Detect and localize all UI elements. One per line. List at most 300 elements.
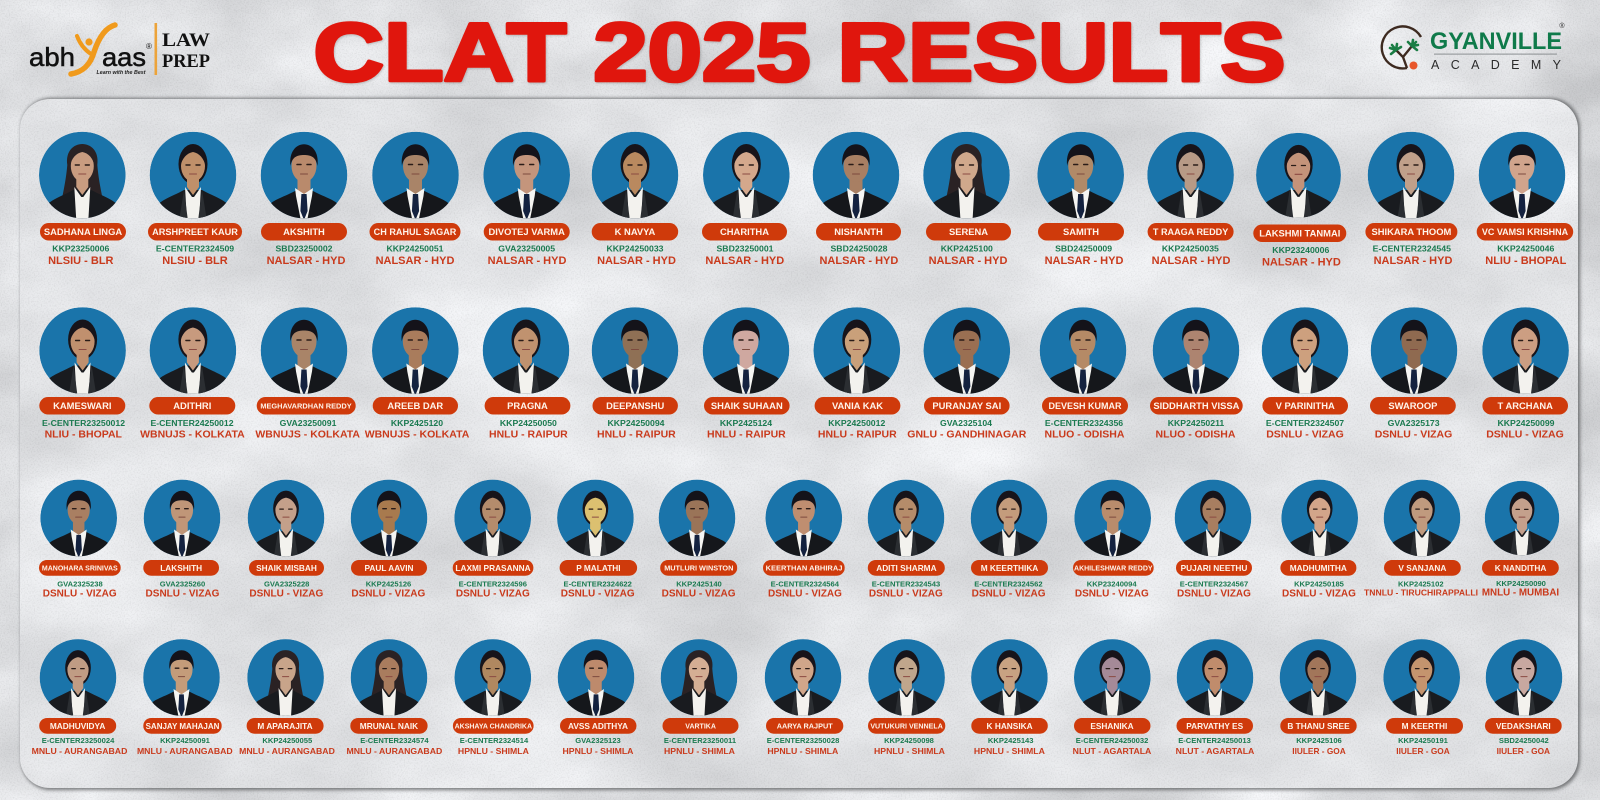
university: DSNLU - VIZAG [1266, 428, 1344, 440]
portrait [1153, 307, 1239, 396]
portrait [483, 307, 569, 396]
portrait [558, 639, 634, 718]
portrait [659, 480, 735, 559]
portrait [814, 307, 900, 396]
roll code: KKP24250191 [1398, 736, 1449, 745]
name pill: ADITHRI [173, 400, 211, 411]
name pill: T RAAGA REDDY [1153, 227, 1228, 237]
roll code: KKP24250012 [828, 418, 885, 428]
student: CHARITHA [702, 132, 790, 267]
university: DSNLU - VIZAG [768, 588, 842, 599]
student: M KEERTHIKA [971, 480, 1048, 599]
roll code: E-CENTER2324622 [564, 579, 632, 588]
logo: gyanville academy [1382, 22, 1565, 72]
university: NLSIU - BLR [162, 255, 228, 267]
portrait [248, 480, 324, 559]
university: NALSAR - HYD [488, 255, 566, 267]
portrait [1281, 480, 1358, 559]
portrait [247, 639, 324, 718]
roll code: E-CENTER2324356 [1045, 418, 1123, 428]
name pill: SHIKARA THOOM [1371, 226, 1452, 237]
university: MNLU - AURANGABAD [347, 746, 442, 756]
name pill: MADHUMITHA [1290, 563, 1347, 573]
university: MNLU - MUMBAI [1482, 587, 1559, 598]
roll code: KKP23250006 [52, 244, 109, 254]
student: AKSHITH [261, 132, 347, 267]
portrait [661, 639, 737, 718]
university: DSNLU - VIZAG [972, 588, 1046, 599]
student: K NAVYA [592, 132, 678, 267]
name pill: PUJARI NEETHU [1181, 563, 1247, 573]
university: NALSAR - HYD [267, 255, 345, 267]
university: NALSAR - HYD [1045, 255, 1123, 267]
student: ADITI SHARMA [868, 480, 945, 599]
portrait [150, 307, 236, 396]
university: IIULER - GOA [1497, 746, 1550, 756]
roll code: KKP24250033 [606, 244, 664, 254]
university: WBNUJS - KOLKATA [255, 428, 360, 440]
university: DSNLU - VIZAG [43, 588, 117, 599]
name pill: LAKSHITH [160, 563, 202, 573]
student: MADHUMITHA [1280, 480, 1358, 599]
university: NALSAR - HYD [705, 255, 784, 267]
university: DSNLU - VIZAG [561, 588, 635, 599]
roll code: KKP24250035 [1162, 244, 1219, 254]
university: NLSIU - BLR [48, 255, 114, 267]
name pill: K HANSIKA [987, 721, 1033, 731]
university: DSNLU - VIZAG [351, 588, 425, 599]
name pill: AREEB DAR [387, 400, 443, 411]
portrait [1383, 639, 1460, 718]
name pill: VARTIKA [685, 724, 716, 730]
portrait [1368, 132, 1454, 221]
university: NLUO - ODISHA [1156, 428, 1236, 440]
portrait [592, 132, 678, 221]
name pill: MEGHAVARDHAN REDDY [260, 401, 352, 410]
logo: abhyaas law prep: PREP [162, 51, 210, 72]
student: AKSHAYA CHANDRIKA [453, 639, 534, 756]
university: HNLU - RAIPUR [489, 428, 568, 440]
name pill: K NANDITHA [1495, 563, 1546, 573]
portrait [1280, 639, 1356, 718]
name pill: SHAIK SUHAAN [711, 400, 783, 411]
portrait [592, 307, 678, 396]
name pill: ESHANIKA [1090, 721, 1134, 731]
student: SHAIK SUHAAN [703, 307, 790, 440]
student: NISHANTH [813, 132, 901, 267]
portrait [40, 639, 116, 718]
university: HPNLU - SHIMLA [664, 746, 736, 756]
row 2 students [39, 307, 1569, 440]
portrait [1262, 307, 1348, 396]
portrait [1482, 307, 1569, 396]
name pill: PRAGNA [507, 400, 548, 411]
roll code: E-CENTER2324543 [872, 579, 940, 588]
student: ARSHPREET KAUR [148, 132, 242, 267]
student: PURANJAY SAI [907, 307, 1027, 440]
name pill: DIVOTEJ VARMA [488, 226, 565, 237]
student: PRAGNA [483, 307, 570, 440]
name pill: VC VAMSI KRISHNA [1482, 227, 1569, 237]
roll code: GVA2325238 [57, 579, 103, 588]
university: GNLU - GANDHINAGAR [907, 428, 1027, 440]
name pill: KEERTHAN ABHIRAJ [766, 564, 842, 573]
roll code: E-CENTER2324562 [974, 579, 1043, 588]
university: WBNUJS - KOLKATA [140, 428, 245, 440]
roll code: KKP2425140 [676, 579, 722, 588]
roll code: KKP24250046 [1497, 244, 1554, 254]
roll code: E-CENTER24250012 [150, 418, 234, 428]
logo: abhyaas law prep: LAW [162, 30, 210, 51]
roll code: GVA2325104 [940, 418, 992, 428]
university: NALSAR - HYD [1374, 255, 1452, 267]
student: SANJAY MAHAJAN [137, 639, 233, 756]
university: NALSAR - HYD [819, 255, 898, 267]
portrait [868, 480, 944, 559]
student: PAUL AAVIN [351, 480, 427, 599]
portrait [557, 480, 634, 559]
student: AARYA RAJPUT [765, 639, 843, 756]
student: PARVATHY ES [1176, 639, 1255, 756]
portrait [261, 132, 347, 221]
name pill: K NAVYA [615, 226, 656, 237]
university: HPNLU - SHIMLA [767, 746, 839, 756]
university: NALSAR - HYD [1262, 256, 1341, 268]
university: NALSAR - HYD [376, 255, 454, 267]
roll code: KKP24250051 [386, 244, 444, 254]
student: VARTIKA [661, 639, 738, 756]
logo: abhyaas law prep: abh [29, 42, 75, 72]
portrait [1384, 480, 1460, 559]
name pill: VEDAKSHARI [1496, 721, 1551, 731]
roll code: KKP24250099 [1498, 418, 1555, 428]
portrait [150, 132, 236, 221]
roll code: E-CENTER23250024 [42, 736, 115, 745]
roll code: KKP2425120 [391, 418, 443, 428]
student: MADHUVIDYA [32, 639, 127, 756]
roll code: GVA2325123 [575, 736, 621, 745]
university: IIULER - GOA [1396, 746, 1450, 756]
name pill: VANIA KAK [832, 400, 883, 411]
portrait [39, 132, 126, 221]
university: WBNUJS - KOLKATA [365, 428, 470, 440]
portrait [971, 639, 1048, 718]
portrait [765, 639, 841, 718]
student: M KEERTHI [1383, 639, 1463, 756]
roll code: E-CENTER24250013 [1178, 736, 1251, 745]
portrait [924, 307, 1010, 396]
name pill: SHAIK MISBAH [256, 563, 317, 573]
student: P MALATHI [557, 480, 637, 599]
university: NLIU - BHOPAL [1485, 255, 1567, 267]
name pill: SANJAY MAHAJAN [146, 722, 220, 731]
row 3 students [39, 480, 1559, 599]
portrait [765, 480, 842, 559]
portrait [1175, 480, 1251, 559]
portrait [813, 132, 899, 221]
logo: gyanville academy: ® [1559, 22, 1565, 30]
university: DSNLU - VIZAG [1177, 588, 1251, 599]
student: SAMITH [1037, 132, 1124, 267]
name pill: P MALATHI [576, 563, 621, 573]
portrait [1040, 307, 1126, 396]
name pill: ADITI SHARMA [876, 563, 937, 573]
portrait [1479, 132, 1565, 221]
portrait [351, 639, 427, 718]
portrait [1177, 639, 1253, 718]
student: CH RAHUL SAGAR [370, 132, 460, 267]
name pill: AARYA RAJPUT [777, 722, 833, 730]
name pill: SIDDHARTH VISSA [1153, 400, 1240, 411]
portrait [372, 132, 459, 221]
portrait [703, 132, 790, 221]
student: B THANU SREE [1280, 639, 1357, 756]
name pill: PAUL AAVIN [364, 563, 414, 573]
student: K NANDITHA [1482, 481, 1559, 598]
student: VC VAMSI KRISHNA [1477, 132, 1573, 267]
roll code: KKP24250055 [262, 736, 313, 745]
name pill: CH RAHUL SAGAR [374, 227, 457, 237]
student: KEERTHAN ABHIRAJ [763, 480, 845, 599]
student: SHAIK MISBAH [248, 480, 324, 599]
university: DSNLU - VIZAG [1486, 428, 1564, 440]
university: HPNLU - SHIMLA [874, 746, 946, 756]
roll code: KKP2425106 [1296, 736, 1342, 745]
roll code: E-CENTER23250028 [767, 736, 839, 745]
student: MUTLURI WINSTON [659, 480, 737, 599]
roll code: KKP24250185 [1294, 579, 1345, 588]
roll code: GVA23250091 [280, 418, 337, 428]
name pill: M KEERTHIKA [981, 563, 1038, 573]
portrait [39, 307, 126, 396]
title: CLAT 2025 RESULTS [314, 6, 1286, 98]
university: HNLU - RAIPUR [818, 428, 897, 440]
portrait [144, 480, 220, 559]
name pill: AKSHAYA CHANDRIKA [455, 723, 532, 730]
university: MNLU - AURANGABAD [239, 746, 335, 756]
name pill: MRUNAL NAIK [360, 721, 418, 731]
student: MANOHARA SRINIVAS [39, 480, 121, 599]
student: T ARCHANA [1482, 307, 1569, 440]
student: LAXMI PRASANNA [453, 480, 533, 599]
roll code: KKP24250050 [500, 418, 557, 428]
name pill: SAMITH [1063, 226, 1099, 237]
portrait [971, 480, 1047, 559]
roll code: E-CENTER2324574 [360, 736, 429, 745]
student: AVSS ADITHYA [558, 639, 636, 756]
name pill: AVSS ADITHYA [568, 721, 628, 731]
student: SHIKARA THOOM [1365, 132, 1457, 267]
roll code: E-CENTER2324509 [156, 244, 234, 254]
university: MNLU - AURANGABAD [137, 746, 233, 756]
name pill: AKHILESHWAR REDDY [1074, 566, 1153, 573]
name pill: V SANJANA [1398, 563, 1446, 573]
student: VEDAKSHARI [1485, 639, 1562, 756]
logo: abhyaas law prep: aas [102, 42, 146, 72]
student: DEVESH KUMAR [1040, 307, 1128, 440]
name pill: LAKSHMI TANMAI [1259, 228, 1340, 239]
portrait [40, 480, 117, 559]
roll code: E-CENTER2324514 [460, 736, 529, 745]
roll code: KKP24250098 [884, 736, 934, 745]
portrait [868, 639, 945, 718]
roll code: SBD23250002 [276, 244, 333, 254]
university: DSNLU - VIZAG [869, 588, 943, 599]
university: IIULER - GOA [1292, 746, 1346, 756]
portrait [1485, 481, 1559, 558]
name pill: AKSHITH [283, 226, 325, 237]
roll code: GVA2325173 [1388, 418, 1440, 428]
roll code: KKP24250094 [608, 418, 665, 428]
logo: abhyaas law prep: ® [146, 42, 152, 51]
university: DSNLU - VIZAG [662, 588, 736, 599]
student: V SANJANA [1364, 480, 1478, 598]
row 4 students [32, 639, 1562, 756]
name pill: MUTLURI WINSTON [664, 564, 733, 573]
roll code: KKP2425126 [366, 579, 411, 588]
student: LAKSHMI TANMAI [1253, 133, 1346, 268]
university: HPNLU - SHIMLA [563, 746, 634, 756]
university: DSNLU - VIZAG [249, 588, 323, 599]
university: MNLU - AURANGABAD [32, 746, 127, 756]
student: DIVOTEJ VARMA [483, 132, 570, 267]
university: NALSAR - HYD [929, 255, 1007, 267]
student: MRUNAL NAIK [347, 639, 442, 756]
name pill: SERENA [949, 226, 988, 237]
student: AREEB DAR [365, 307, 470, 440]
portrait [1074, 480, 1151, 559]
university: NLUT - AGARTALA [1073, 746, 1152, 756]
name pill: CHARITHA [720, 226, 769, 237]
student: DEEPANSHU [592, 307, 678, 440]
roll code: KKP2425143 [988, 736, 1034, 745]
roll code: E-CENTER23250012 [42, 418, 125, 428]
student: AKHILESHWAR REDDY [1073, 480, 1154, 599]
portrait [703, 307, 789, 396]
roll code: SBD24250028 [830, 244, 888, 254]
student: KAMESWARI [39, 307, 126, 440]
name pill: KAMESWARI [53, 400, 111, 411]
roll code: E-CENTER2324507 [1266, 418, 1344, 428]
row 1 students [39, 132, 1573, 268]
student: ADITHRI [140, 307, 245, 440]
portrait [1074, 639, 1151, 718]
student: SWAROOP [1370, 307, 1457, 440]
name pill: PURANJAY SAI [932, 400, 1001, 411]
student: SADHANA LINGA [39, 132, 126, 267]
portrait [1371, 307, 1457, 396]
roll code: GVA23250005 [498, 244, 555, 254]
roll code: GVA2325260 [160, 579, 205, 588]
roll code: KKP2425124 [720, 418, 772, 428]
student: SERENA [923, 132, 1011, 267]
name pill: M KEERTHI [1402, 721, 1447, 731]
university: NLUO - ODISHA [1045, 428, 1125, 440]
logo: gyanville academy: ACADEMY [1431, 58, 1562, 72]
roll code: SBD24250042 [1499, 736, 1549, 745]
university: DSNLU - VIZAG [1282, 588, 1356, 599]
roll code: KKP2425102 [1398, 579, 1444, 588]
logo: abhyaas law prep [29, 23, 210, 76]
roll code: KKP24250091 [160, 736, 211, 745]
name pill: SADHANA LINGA [44, 226, 122, 237]
university: HNLU - RAIPUR [707, 428, 786, 440]
roll code: KKP23240006 [1272, 245, 1329, 255]
student: SIDDHARTH VISSA [1150, 307, 1243, 440]
name pill: V PARINITHA [1276, 400, 1335, 411]
portrait [923, 132, 1010, 221]
name pill: ARSHPREET KAUR [152, 227, 238, 237]
name pill: DEEPANSHU [606, 400, 665, 411]
name pill: DEVESH KUMAR [1048, 401, 1122, 411]
portrait [1256, 133, 1341, 220]
student: PUJARI NEETHU [1175, 480, 1252, 599]
roll code: SBD24250009 [1055, 244, 1112, 254]
university: DSNLU - VIZAG [1375, 428, 1452, 440]
university: NLIU - BHOPAL [45, 428, 123, 440]
portrait [351, 480, 427, 559]
student: LAKSHITH [143, 480, 220, 599]
university: TNNLU - TIRUCHIRAPPALLI [1364, 588, 1478, 598]
roll code: KKP2425100 [941, 244, 993, 254]
roll code: E-CENTER2324596 [459, 579, 527, 588]
university: DSNLU - VIZAG [1075, 588, 1149, 599]
roll code: E-CENTER2324545 [1373, 244, 1451, 254]
name pill: T ARCHANA [1498, 400, 1553, 411]
name pill: PARVATHY ES [1186, 721, 1244, 731]
student: M APARAJITA [239, 639, 335, 756]
student: V PARINITHA [1262, 307, 1348, 440]
logo: abhyaas law prep: Learn with the Best [96, 70, 146, 76]
student: VANIA KAK [814, 307, 900, 440]
university: DSNLU - VIZAG [456, 588, 530, 599]
portrait [143, 639, 220, 718]
roll code: E-CENTER24250032 [1076, 736, 1148, 745]
portrait [261, 307, 347, 396]
roll code: E-CENTER2324564 [771, 579, 840, 588]
roll code: KKP23240094 [1087, 579, 1137, 588]
portrait [454, 480, 531, 559]
university: HPNLU - SHIMLA [458, 746, 530, 756]
roll code: KKP24250211 [1168, 418, 1224, 428]
name pill: NISHANTH [834, 226, 883, 237]
student: VUTUKURI VENNELA [868, 639, 946, 756]
roll code: E-CENTER2324567 [1180, 579, 1248, 588]
name pill: MANOHARA SRINIVAS [42, 566, 118, 572]
name pill: VUTUKURI VENNELA [870, 722, 943, 730]
university: HNLU - RAIPUR [597, 428, 676, 440]
roll code: GVA2325228 [264, 579, 309, 588]
university: NALSAR - HYD [597, 255, 676, 267]
portrait [483, 132, 570, 221]
student: ESHANIKA [1073, 639, 1152, 756]
name pill: B THANU SREE [1287, 721, 1350, 731]
student: K HANSIKA [971, 639, 1048, 756]
roll code: E-CENTER23250011 [664, 736, 737, 745]
roll code: KKP24250090 [1496, 579, 1546, 588]
university: HPNLU - SHIMLA [974, 746, 1046, 756]
portrait [372, 307, 459, 396]
portrait [454, 639, 531, 718]
student: MEGHAVARDHAN REDDY [255, 307, 360, 440]
logo: gyanville academy: GYANVILLE [1430, 28, 1562, 55]
university: NLUT - AGARTALA [1176, 746, 1255, 756]
name pill: LAXMI PRASANNA [455, 563, 531, 573]
university: DSNLU - VIZAG [146, 588, 220, 599]
portrait [1486, 639, 1562, 718]
name pill: SWAROOP [1388, 400, 1437, 411]
name pill: MADHUVIDYA [50, 721, 105, 731]
